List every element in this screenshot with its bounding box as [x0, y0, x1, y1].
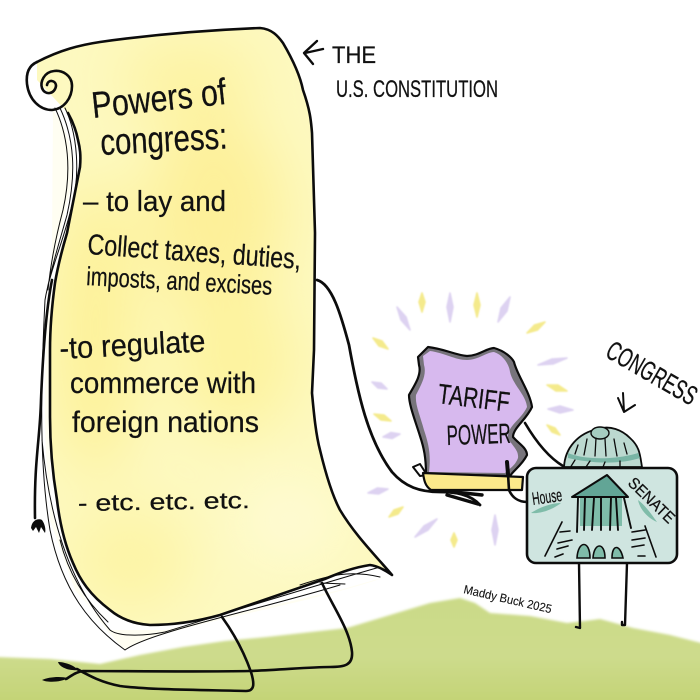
- scroll text: powers of congress: [59, 71, 302, 516]
- building columns: [577, 498, 631, 532]
- scroll right arm holding tariff power: [317, 280, 482, 505]
- purple rays: [368, 293, 573, 545]
- scroll sheet: [30, 20, 400, 640]
- Congress building character: [527, 427, 678, 628]
- House brush mark: [531, 503, 561, 513]
- Congress building character: SENATE: [624, 475, 678, 527]
- ground: green hill: [0, 598, 700, 700]
- arrow to Congress: [618, 393, 635, 412]
- label: the U.S. Constitution: THE: [332, 42, 376, 69]
- scroll legs and feet: [42, 583, 352, 691]
- Senate brush mark: [638, 500, 657, 522]
- list item: tax power: – to lay and: [83, 186, 226, 218]
- list item: etc: - etc. etc. etc.: [78, 487, 250, 516]
- heading: Powers of Congress: Powers of: [90, 71, 229, 126]
- rays: glow around tariff power: [368, 293, 573, 547]
- Capitol dome: [564, 427, 642, 468]
- building pediment: [572, 475, 628, 497]
- arrow to scroll: [304, 41, 323, 64]
- scroll back pages: [45, 110, 392, 650]
- tablet base: [423, 473, 523, 490]
- list item: commerce power: -to regulate: [59, 323, 206, 366]
- list item: tax power: Collect taxes, duties,: [87, 229, 302, 276]
- scroll curl: [27, 62, 72, 110]
- list item: commerce power: foreign nations: [72, 406, 259, 439]
- list item: tax power: imposts, and excises: [86, 261, 273, 301]
- tablet face: [416, 351, 527, 473]
- tablet: tariff power: [409, 347, 532, 490]
- Congress arms: [508, 423, 563, 502]
- Congress building character: House: [531, 485, 563, 509]
- building steps: [545, 522, 656, 557]
- building doors: [577, 544, 623, 558]
- tablet shadow edge: [409, 347, 532, 476]
- heading: Powers of Congress: congress:: [99, 115, 228, 163]
- scroll left arm: [31, 280, 52, 533]
- tablet: tariff power: TARIFF: [436, 378, 512, 418]
- list item: tax power: [83, 186, 302, 301]
- label: the U.S. Constitution: U.S. CONSTITUTION: [336, 76, 498, 103]
- heading: Powers of Congress: [90, 71, 229, 163]
- sign: House and Senate: [527, 468, 677, 563]
- list item: commerce power: [59, 323, 259, 439]
- yellow rays: [373, 293, 567, 547]
- list item: commerce power: commerce with: [70, 367, 256, 400]
- scroll outline: [37, 28, 392, 625]
- tablet: tariff power: POWER: [446, 418, 511, 451]
- scroll: the U.S. Constitution: [27, 20, 400, 650]
- scroll page edges: [42, 108, 380, 650]
- paper watercolor patches: [55, 40, 340, 610]
- label: the U.S. Constitution: [304, 41, 498, 103]
- Congress legs: [576, 563, 627, 628]
- holding finger: [507, 462, 508, 474]
- artist signature: Maddy Buck 2025: [462, 582, 553, 616]
